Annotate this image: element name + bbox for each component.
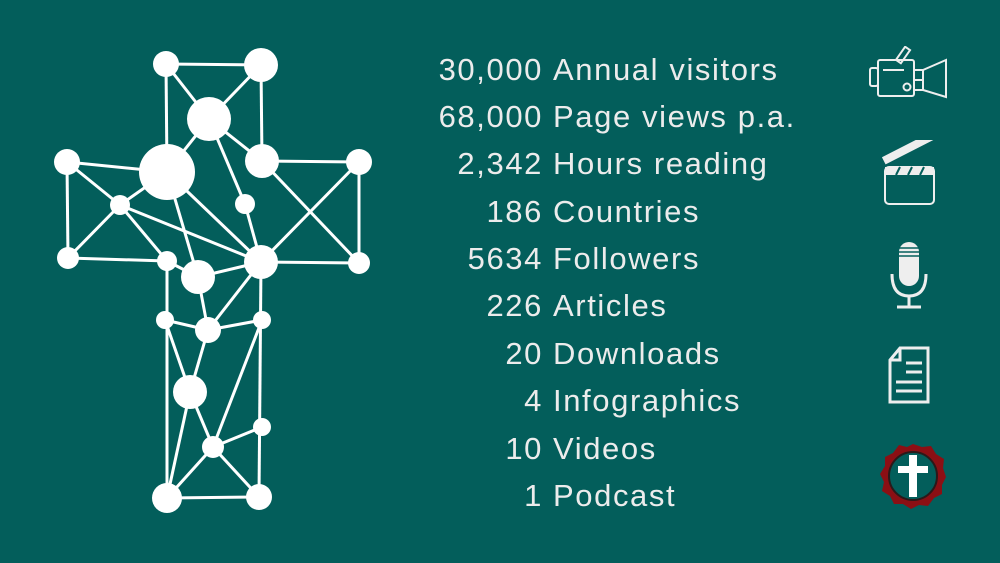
stat: downloads: Downloads [553, 336, 721, 371]
stat: articles: 226 [486, 288, 543, 323]
stat: page views: 68,000 [439, 99, 543, 134]
icon: video camera [869, 46, 947, 98]
stat: hours reading: Hours reading [553, 146, 769, 181]
cross network graphic [54, 48, 372, 513]
stat: annual visitors: 30,000 [439, 52, 543, 87]
stat: podcast: Podcast [553, 478, 676, 513]
stat: videos: 10 [505, 431, 543, 466]
stat: infographics: 4 [524, 383, 543, 418]
stat: followers [468, 241, 700, 276]
stat: articles: Articles [553, 288, 667, 323]
stat: downloads: 20 [505, 336, 543, 371]
stat: page views: Page views p.a. [553, 99, 796, 134]
stat: infographics: Infographics [553, 383, 741, 418]
stat: page views [439, 99, 796, 134]
statistics list [439, 52, 796, 513]
stat: hours reading: 2,342 [457, 146, 543, 181]
stat: annual visitors: Annual visitors [553, 52, 779, 87]
stat: followers: Followers [553, 241, 700, 276]
stat: annual visitors [439, 52, 779, 87]
stat: countries: Countries [553, 194, 700, 229]
stat: countries [486, 194, 700, 229]
icon: document [888, 346, 930, 404]
icon: clapperboard [882, 140, 935, 205]
stat: videos [505, 431, 657, 466]
stat: countries: 186 [486, 194, 543, 229]
stat: videos: Videos [553, 431, 657, 466]
stat: hours reading [457, 146, 769, 181]
stat: articles [486, 288, 667, 323]
stat: followers: 5634 [468, 241, 543, 276]
stat: podcast: 1 [524, 478, 543, 513]
icon: cross seal [880, 444, 946, 509]
icon: microphone [890, 242, 928, 308]
